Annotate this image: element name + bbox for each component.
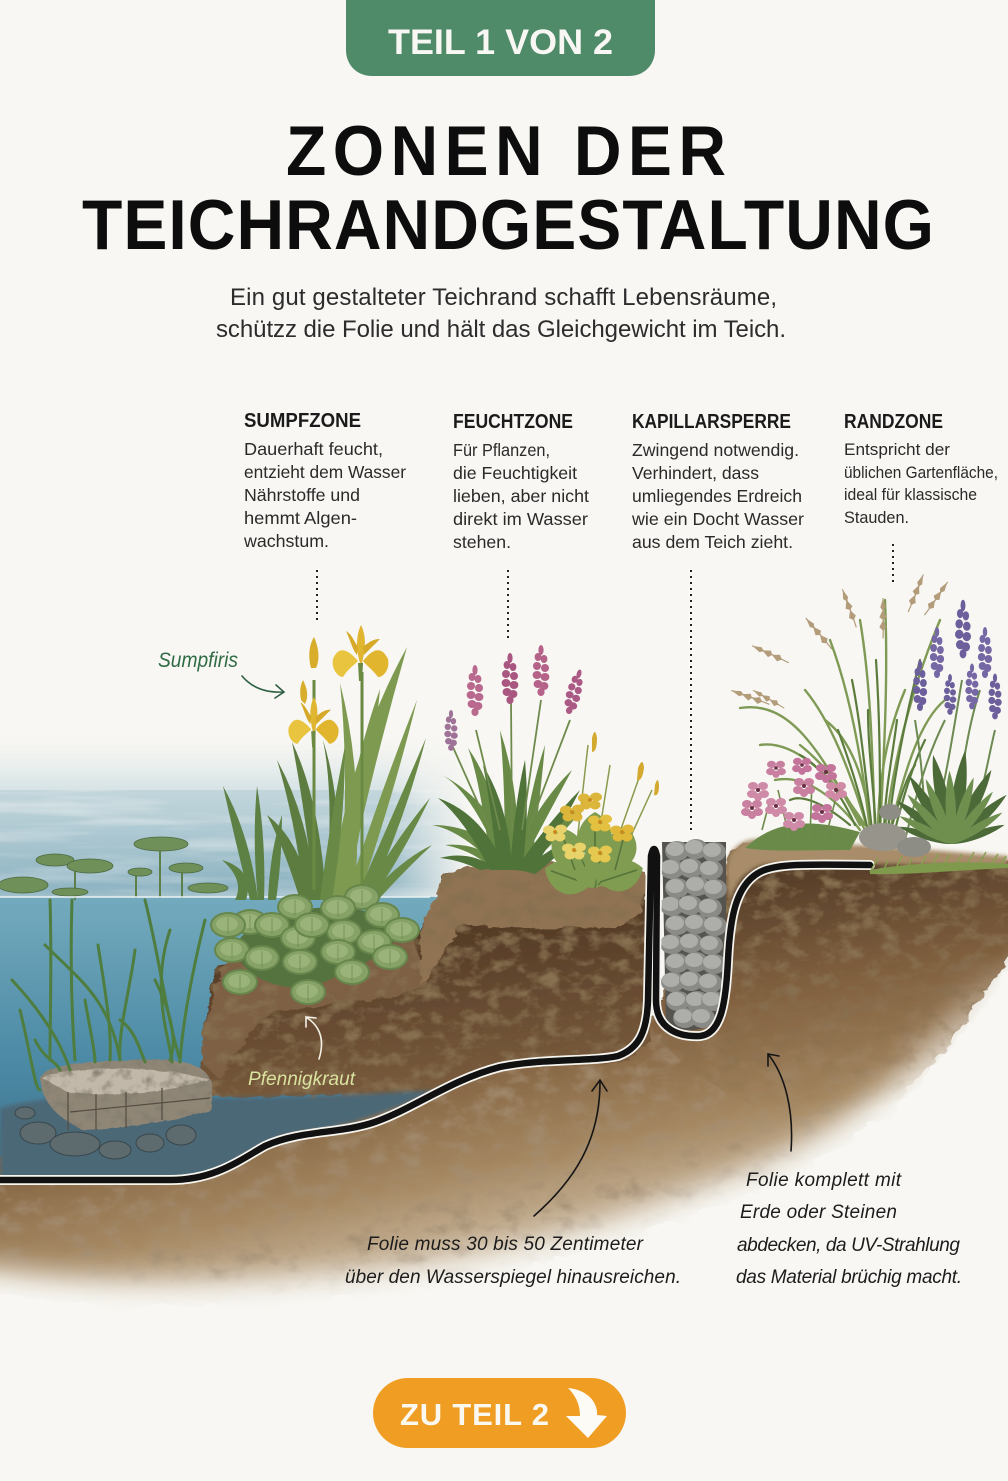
subtitle: schützz die Folie und hält das Gleichgewicht im Teich. [216, 316, 786, 343]
gravel trench [660, 839, 727, 1030]
zone column: Feuchtzone: FEUCHTZONE [453, 411, 573, 433]
zone column: Kapillarsperre: wie ein Docht Wasser [631, 509, 804, 529]
pennywort leaves [210, 884, 420, 1005]
zone column: Kapillarsperre: Verhindert, dass [632, 463, 759, 483]
zone column: Randzone: Stauden. [844, 508, 909, 527]
primrose plant [539, 732, 659, 901]
upper soil right of trench [660, 844, 1008, 1120]
water line [0, 896, 430, 898]
callout: Pfennigkraut: Pfennigkraut [248, 1069, 356, 1090]
zone column: Sumpfzone: Nährstoffe und [244, 485, 360, 505]
shelf: swamp zone terrace [200, 928, 428, 1078]
submerged grasses [12, 900, 205, 1090]
right rim surface [726, 839, 1008, 905]
zone column: Randzone: ideal für klassische [844, 485, 977, 504]
zone column: Feuchtzone: direkt im Wasser [453, 509, 588, 529]
zone column: Kapillarsperre: KAPILLARSPERRE [632, 411, 791, 433]
callout: liner height: über den Wasserspiegel hinausreichen. [345, 1267, 681, 1288]
zone column: Randzone: Entspricht der [844, 440, 950, 459]
lavender [894, 600, 1008, 848]
moist zone plants [432, 645, 590, 874]
title [82, 112, 934, 264]
lily pads [0, 837, 228, 900]
button: Zu Teil 2 [373, 1378, 626, 1448]
zone column: Feuchtzone: die Feuchtigkeit [453, 463, 577, 483]
pond pebbles [15, 1107, 196, 1159]
header tab: Teil 1 von 2: TEIL 1 VON 2 [388, 23, 613, 62]
callout: liner height [345, 1080, 681, 1288]
callout: cover liner [736, 1054, 962, 1288]
zone column: Kapillarsperre: umliegendes Erdreich [632, 486, 802, 506]
zone column: Kapillarsperre: aus dem Teich zieht. [632, 532, 793, 552]
pink perennials [741, 758, 860, 850]
callout: Sumpfiris [158, 649, 284, 698]
light subsoil [0, 860, 1008, 1307]
zone column: Feuchtzone: stehen. [453, 532, 511, 552]
header tab: Teil 1 von 2 [346, 0, 655, 76]
zone column: Sumpfzone: entzieht dem Wasser [244, 462, 406, 482]
zone column: Sumpfzone: SUMPFZONE [244, 410, 361, 432]
zone column: Sumpfzone [243, 410, 406, 551]
border grass [730, 574, 950, 832]
title: ZONEN DER [286, 112, 726, 190]
iris flowers [288, 625, 388, 747]
iris leaves [267, 647, 432, 900]
button: Zu Teil 2: ZU TEIL 2 [400, 1397, 549, 1432]
zone column: Sumpfzone: wachstum. [243, 531, 329, 551]
subtitle: Ein gut gestalteter Teichrand schafft Lebensräume, [230, 284, 777, 311]
title: TEICHRANDGESTALTUNG [82, 186, 934, 264]
pond liner [0, 849, 870, 1180]
shelf: moist zone terrace [420, 864, 645, 985]
zone column: Feuchtzone [453, 411, 589, 552]
zone column: Randzone: RANDZONE [844, 411, 943, 433]
zone column: Kapillarsperre: Zwingend notwendig. [632, 440, 799, 460]
callout: cover liner: Erde oder Steinen [740, 1202, 897, 1223]
pond floor [0, 1090, 436, 1180]
callout: cover liner: abdecken, da UV-Strahlung [737, 1235, 960, 1256]
zone column: Randzone [844, 411, 998, 527]
dotted leader lines [317, 544, 893, 830]
callout: Pfennigkraut [248, 1017, 356, 1090]
cross-section illustration [0, 574, 1008, 1313]
zone column: Sumpfzone: Dauerhaft feucht, [244, 439, 383, 459]
dark soil left of trench [196, 875, 650, 1098]
callout: liner height: Folie muss 30 bis 50 Zentimeter [367, 1234, 644, 1255]
water surface seen behind [0, 756, 464, 897]
zone column: Kapillarsperre [631, 411, 804, 552]
zone column: Feuchtzone: lieben, aber nicht [453, 486, 589, 506]
pond water body [0, 897, 440, 1182]
subtitle [216, 284, 786, 343]
callout: Sumpfiris: Sumpfiris [158, 649, 238, 672]
callout: cover liner: das Material brüchig macht. [736, 1267, 962, 1288]
rim rocks and lawn edge [859, 804, 1008, 874]
callout: cover liner: Folie komplett mit [746, 1170, 902, 1191]
subsoil fade into paper [0, 946, 1008, 1313]
zone column: Feuchtzone: Für Pflanzen, [453, 440, 550, 460]
reeds behind iris [222, 786, 282, 900]
stone block [40, 1060, 212, 1130]
zone column: Sumpfzone: hemmt Algen- [244, 508, 357, 528]
